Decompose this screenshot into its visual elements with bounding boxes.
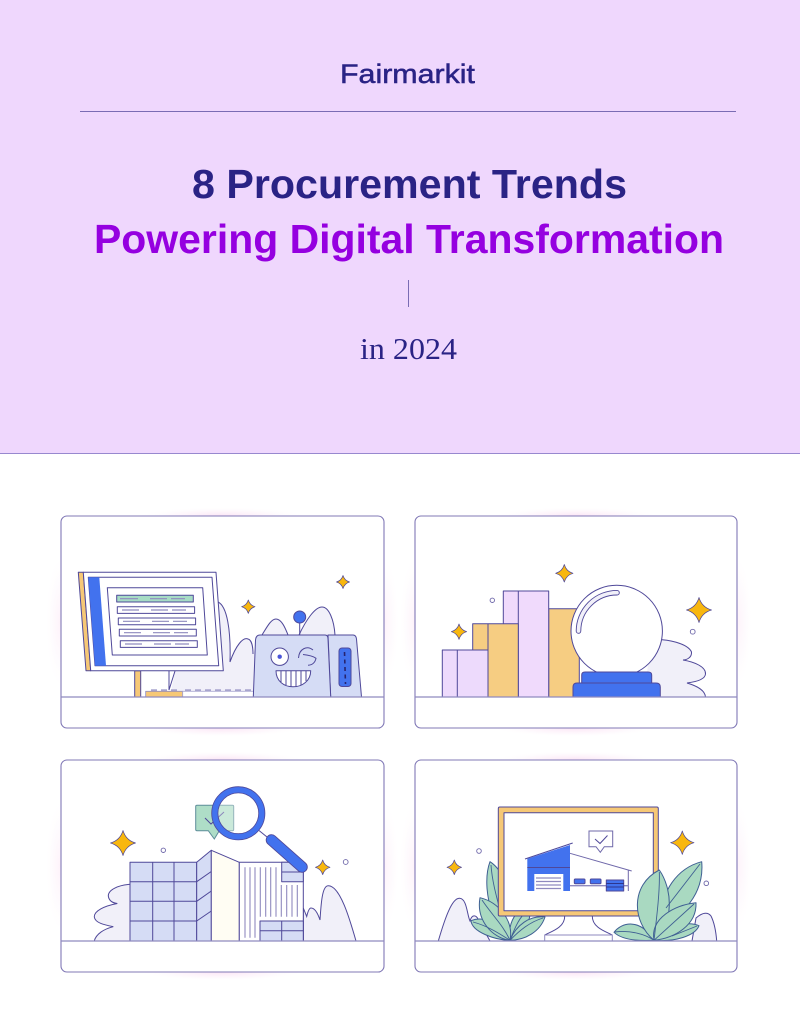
lavender hills	[438, 898, 717, 941]
subtitle: in 2024: in 2024	[360, 331, 458, 366]
lavender hills	[170, 602, 340, 697]
warehouse	[525, 843, 632, 891]
crystal ball	[571, 585, 662, 697]
check bubble	[589, 831, 613, 852]
icon: sparkle	[315, 860, 330, 875]
monitor	[78, 572, 223, 697]
lavender cloud	[645, 640, 706, 697]
icon: dot	[704, 881, 709, 886]
header panel	[0, 0, 800, 454]
panel: crystal ball and bars	[415, 516, 737, 728]
building	[130, 850, 303, 941]
robot	[253, 611, 362, 697]
title line 1: 8 Procurement Trends	[192, 161, 627, 207]
panel: warehouse on monitor	[415, 760, 737, 972]
title line 2: Powering Digital Transformation	[94, 216, 724, 262]
icon: sparkle	[451, 624, 467, 639]
magnifying glass	[215, 790, 302, 867]
icon: sparkle	[336, 576, 350, 588]
icon: sparkle	[110, 830, 136, 856]
icon: sparkle	[242, 600, 255, 613]
icon: sparkle	[447, 860, 462, 875]
plant: left leaves	[471, 862, 545, 940]
keyboard	[146, 690, 280, 697]
plant: right leaves	[614, 862, 702, 941]
icon: dot	[161, 848, 166, 852]
icon: dot	[477, 849, 481, 853]
icon: sparkle	[671, 831, 694, 854]
icon: dot	[343, 860, 348, 864]
panel: building and magnifier	[61, 760, 384, 972]
logo: Fairmarkit: Fairmarkit	[340, 59, 476, 89]
card glow backgrounds	[45, 507, 753, 981]
icon: sparkle	[556, 564, 573, 582]
monitor	[498, 807, 658, 941]
icon: dot	[690, 629, 695, 634]
lavender hill	[303, 886, 356, 941]
chat bubble	[196, 805, 234, 839]
lavender cloud	[94, 884, 131, 941]
icon: dot	[490, 598, 494, 602]
panel: AI robot and computer	[61, 516, 384, 728]
icon: sparkle	[686, 598, 712, 622]
bar chart	[442, 591, 579, 697]
